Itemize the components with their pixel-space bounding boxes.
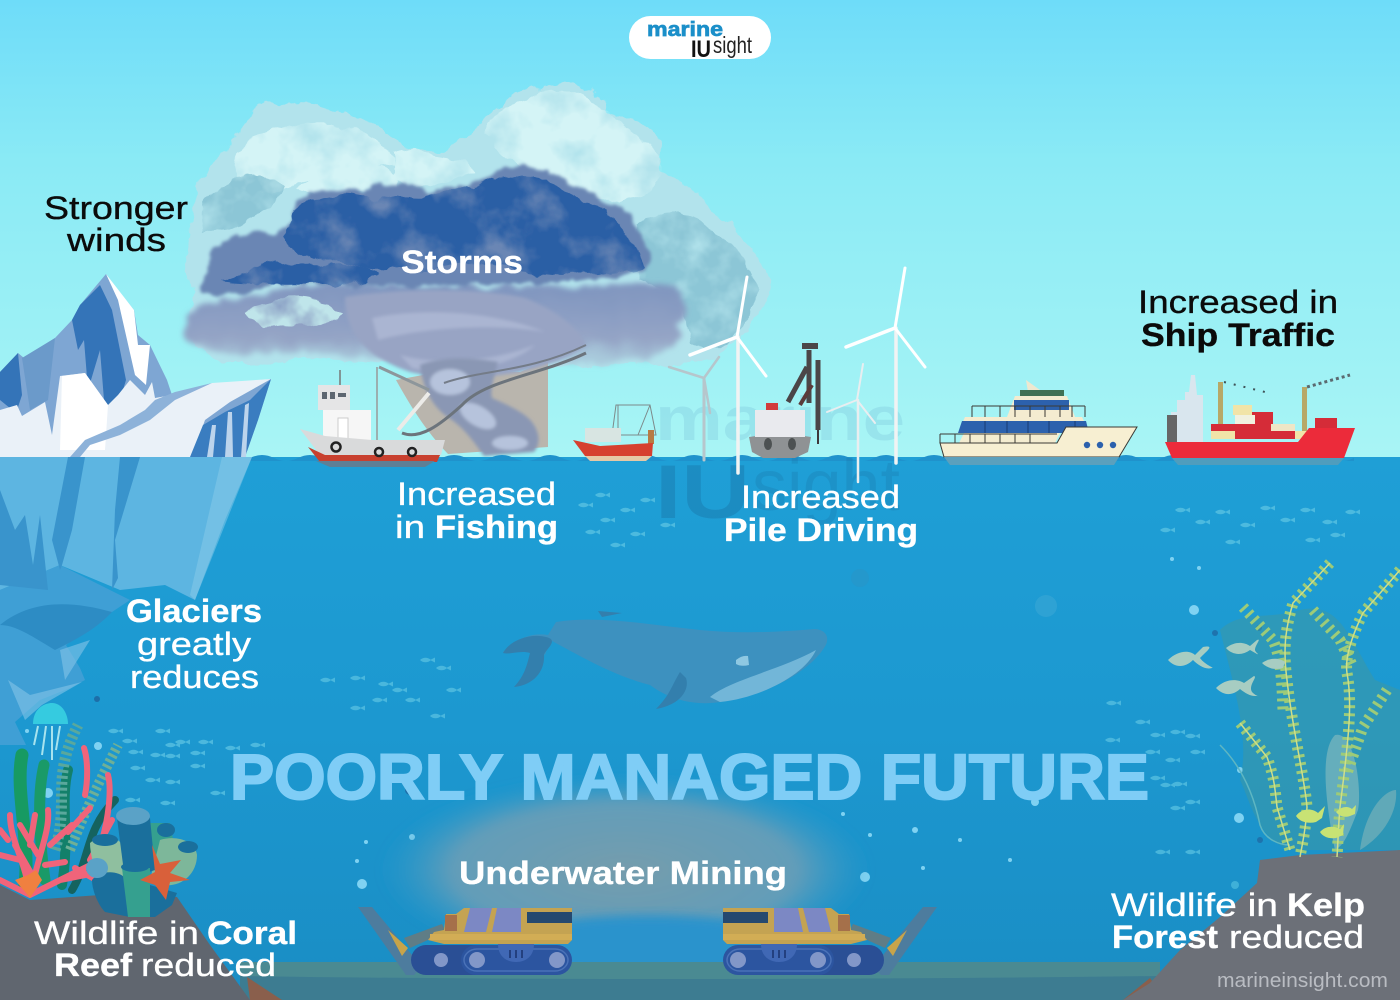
kelp forest plants bbox=[1168, 563, 1400, 857]
deep blue cloud core bbox=[225, 177, 645, 285]
twisting column bbox=[420, 358, 538, 456]
logo: marine bbox=[647, 19, 723, 41]
label: increased in ship traffic: Increased in bbox=[1138, 284, 1338, 320]
label: increased in fishing bbox=[395, 476, 558, 545]
label: wildlife in kelp forest reduced: Wildlife in bbox=[1111, 887, 1278, 923]
label: wildlife in kelp forest reduced: reduced bbox=[1229, 919, 1364, 955]
wind turbine grey background bbox=[669, 357, 719, 460]
passenger ship bbox=[940, 380, 1137, 465]
fish school lower right bbox=[1105, 700, 1205, 854]
label: wildlife in coral reef reduced: Wildlife in bbox=[34, 915, 199, 951]
dark kelp backdrop bbox=[1220, 608, 1400, 850]
storm cloud bbox=[184, 84, 768, 367]
rear funnel beige bbox=[396, 360, 548, 454]
label: storms: Storms bbox=[401, 244, 523, 280]
wind turbine right bbox=[846, 268, 925, 463]
jellyfish bbox=[33, 703, 68, 760]
watermark: sight bbox=[752, 446, 900, 526]
wind turbine small bbox=[827, 364, 875, 482]
teal cloud shade bbox=[198, 174, 757, 350]
seaweed green bbox=[20, 755, 115, 890]
label: wildlife in coral reef reduced: Coral bbox=[207, 915, 297, 951]
sea grass blades bbox=[1326, 735, 1359, 850]
label: wildlife in coral reef reduced: reduced bbox=[141, 947, 276, 983]
logo: IU bbox=[691, 36, 711, 63]
leafy fronds bbox=[55, 725, 118, 850]
kelp stems bbox=[1240, 563, 1400, 857]
yellow fish bbox=[1296, 805, 1356, 838]
dark storm band bbox=[203, 167, 651, 295]
label: stronger winds: Stronger bbox=[44, 190, 188, 226]
label: wildlife in kelp forest reduced: Kelp bbox=[1287, 887, 1365, 923]
whale flipper bbox=[656, 672, 687, 709]
watermark: IU bbox=[655, 450, 750, 535]
label: underwater mining: Underwater Mining bbox=[459, 855, 787, 891]
icy blue shadows bbox=[0, 285, 126, 430]
lilac lower cloud bbox=[184, 285, 683, 363]
label: increased in ship traffic: Ship Traffic bbox=[1141, 317, 1335, 353]
wind turbine left bbox=[690, 277, 766, 473]
watermark: marine bbox=[655, 385, 905, 454]
starfish bbox=[140, 845, 190, 900]
right ice cliff bbox=[190, 379, 271, 457]
label: wildlife in coral reef reduced: Reef bbox=[54, 947, 132, 983]
tornado bbox=[345, 290, 586, 456]
label: increased in fishing: Fishing bbox=[435, 509, 558, 545]
white snow faces bbox=[0, 373, 271, 457]
fish school lower left bbox=[108, 728, 265, 806]
silver fish bbox=[1168, 640, 1285, 696]
whale dorsal fin bbox=[598, 611, 622, 617]
website credit: marineinsight.com bbox=[1217, 970, 1388, 992]
mining vehicle left bbox=[358, 907, 572, 975]
mining vehicle right bbox=[723, 907, 937, 975]
label: increased in ship traffic bbox=[1138, 284, 1338, 353]
pale cloud highlights bbox=[233, 94, 656, 205]
light cloud body bbox=[187, 84, 768, 367]
label: glaciers greatly reduces: greatly bbox=[137, 626, 251, 662]
bubbles bbox=[25, 557, 1263, 889]
iceberg below water bbox=[0, 457, 252, 745]
logo bbox=[629, 16, 771, 63]
sea floor bbox=[240, 915, 1160, 1000]
label: stronger winds: winds bbox=[66, 222, 166, 258]
tube sponges bbox=[86, 807, 198, 917]
label: glaciers greatly reduces: Glaciers bbox=[126, 593, 262, 629]
pile driving vessel bbox=[749, 346, 818, 458]
coral reef plants bbox=[0, 725, 198, 917]
label: wildlife in coral reef reduced bbox=[34, 915, 297, 983]
main title: POORLY MANAGED FUTURE bbox=[230, 741, 1149, 813]
iceberg above water bbox=[0, 274, 271, 457]
ocean bbox=[0, 455, 1400, 1000]
pink branching coral bbox=[0, 748, 112, 895]
whale bbox=[503, 611, 827, 709]
sky background bbox=[0, 0, 1400, 460]
label: increased pile driving: Pile Driving bbox=[724, 512, 918, 548]
container ship bbox=[1165, 375, 1355, 465]
label: glaciers greatly reduces bbox=[126, 593, 262, 695]
label: glaciers greatly reduces: reduces bbox=[130, 659, 259, 695]
sediment dust cloud bbox=[380, 775, 870, 965]
kelp forest rock bbox=[1123, 850, 1400, 1000]
upper funnel bbox=[345, 290, 586, 377]
label: wildlife in kelp forest reduced: Forest bbox=[1112, 919, 1218, 955]
whale tail fluke bbox=[503, 636, 552, 687]
small red trawler bbox=[573, 405, 656, 461]
label: increased pile driving bbox=[724, 479, 918, 548]
label: increased in fishing: Increased bbox=[397, 476, 556, 512]
fish school upper right bbox=[1160, 506, 1360, 544]
orange coral base bbox=[15, 870, 42, 898]
whale belly bbox=[710, 650, 816, 702]
watermark bbox=[655, 385, 905, 535]
whale eye bbox=[736, 656, 749, 666]
funnel highlights bbox=[372, 312, 545, 371]
logo: sight bbox=[713, 32, 752, 58]
label: increased pile driving: Increased bbox=[741, 479, 900, 515]
wave crests bbox=[250, 455, 1354, 461]
coral reef rock bbox=[0, 885, 282, 1000]
label: wildlife in kelp forest reduced bbox=[1111, 887, 1365, 955]
fish school upper centre bbox=[578, 492, 675, 548]
fishing boat bbox=[300, 367, 445, 467]
fish school mid left bbox=[320, 658, 461, 718]
label: stronger winds bbox=[44, 190, 188, 258]
pale gap in lilac cloud bbox=[245, 297, 345, 329]
label: increased in fishing: in bbox=[395, 509, 425, 545]
debris wisps bbox=[402, 353, 586, 435]
